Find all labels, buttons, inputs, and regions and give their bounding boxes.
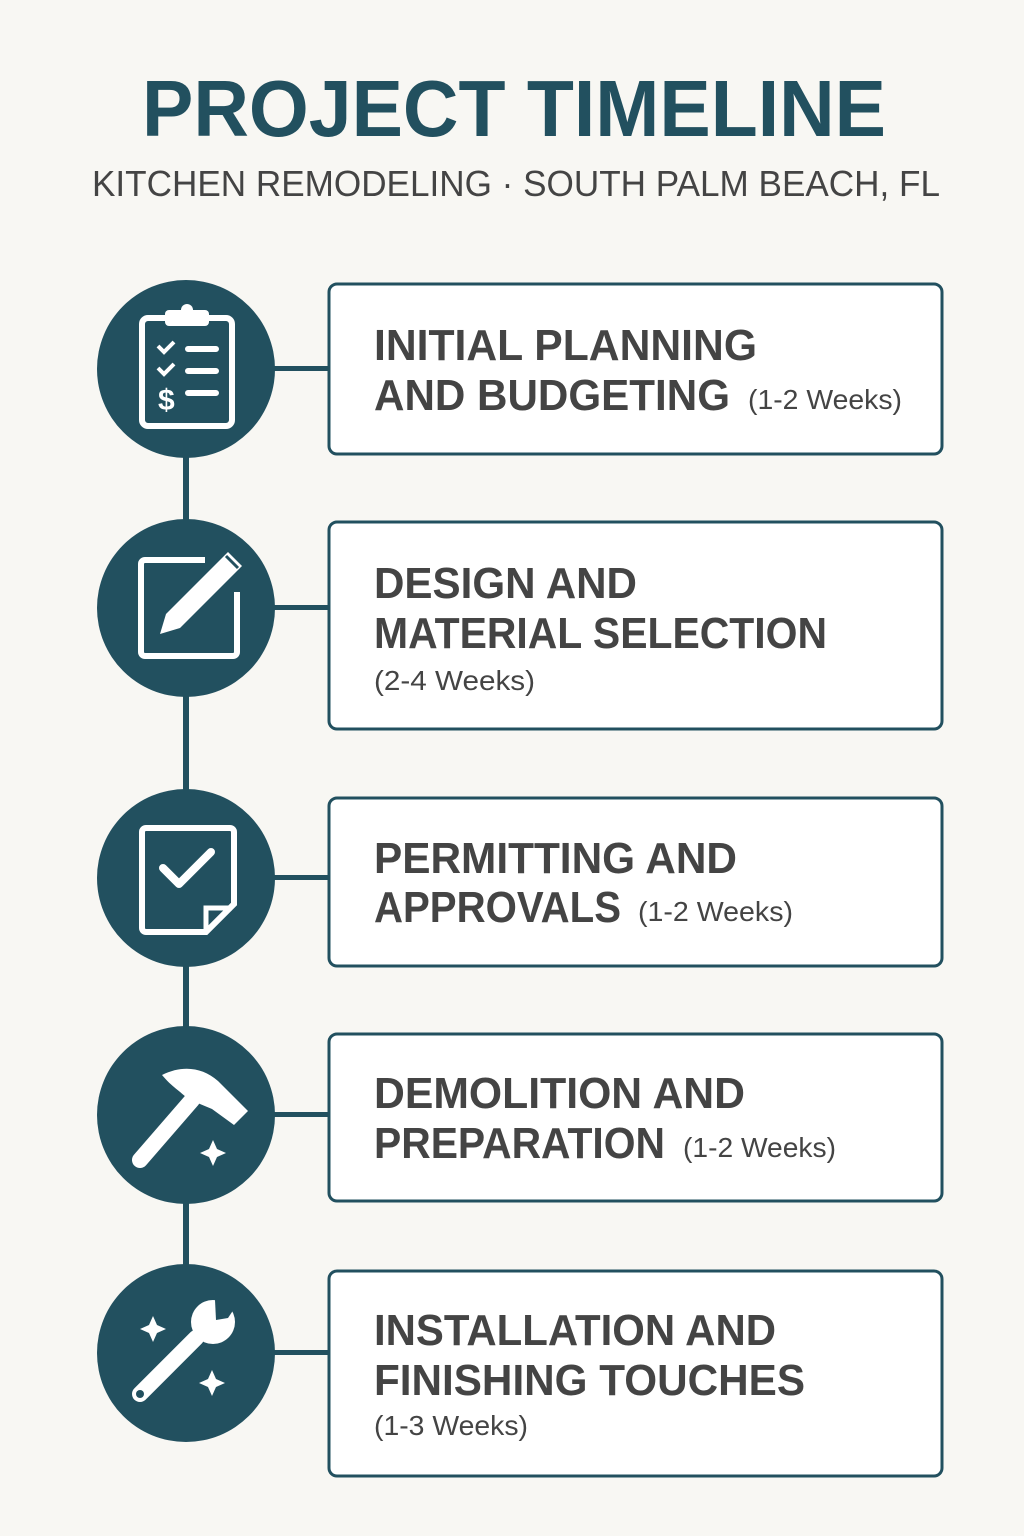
box: initial planning: AND BUDGETING <box>374 371 730 420</box>
box: design: DESIGN AND <box>374 559 637 608</box>
step 3: permitting <box>97 789 942 967</box>
box: permitting <box>329 798 942 966</box>
step 2: design <box>97 519 942 729</box>
box: installation: FINISHING TOUCHES <box>374 1356 805 1405</box>
icon: pencil on paper <box>97 519 275 697</box>
box: demolition: PREPARATION <box>374 1119 665 1168</box>
step 4: demolition <box>97 1026 942 1204</box>
subtitle: KITCHEN REMODELING · SOUTH PALM BEACH, FL <box>92 163 940 204</box>
box: demolition: DEMOLITION AND <box>374 1069 745 1118</box>
box: permitting: (1-2 Weeks) <box>638 896 793 927</box>
box: initial planning: INITIAL PLANNING <box>374 321 757 370</box>
step 5: installation <box>97 1264 942 1476</box>
box: permitting: APPROVALS <box>374 883 621 932</box>
box: installation: INSTALLATION AND <box>374 1306 776 1355</box>
icon: clipboard: $ <box>158 384 175 417</box>
box: installation: (1-3 Weeks) <box>374 1410 528 1441</box>
box: design: MATERIAL SELECTION <box>374 609 827 658</box>
step 1: planning <box>97 280 942 458</box>
icon: document check <box>97 789 275 967</box>
box: permitting: PERMITTING AND <box>374 834 737 883</box>
icon: wrench <box>97 1264 275 1442</box>
box: initial planning: (1-2 Weeks) <box>748 384 902 415</box>
icon: hammer <box>97 1026 275 1204</box>
box: design: (2-4 Weeks) <box>374 665 535 696</box>
box: initial planning <box>329 284 942 454</box>
box: demolition <box>329 1034 942 1201</box>
title: PROJECT TIMELINE <box>142 64 886 153</box>
box: installation <box>329 1271 942 1476</box>
box: design <box>329 522 942 729</box>
box: demolition: (1-2 Weeks) <box>683 1132 836 1163</box>
icon: clipboard <box>97 280 275 458</box>
timeline vertical line <box>183 369 189 1353</box>
connectors <box>270 366 330 1355</box>
